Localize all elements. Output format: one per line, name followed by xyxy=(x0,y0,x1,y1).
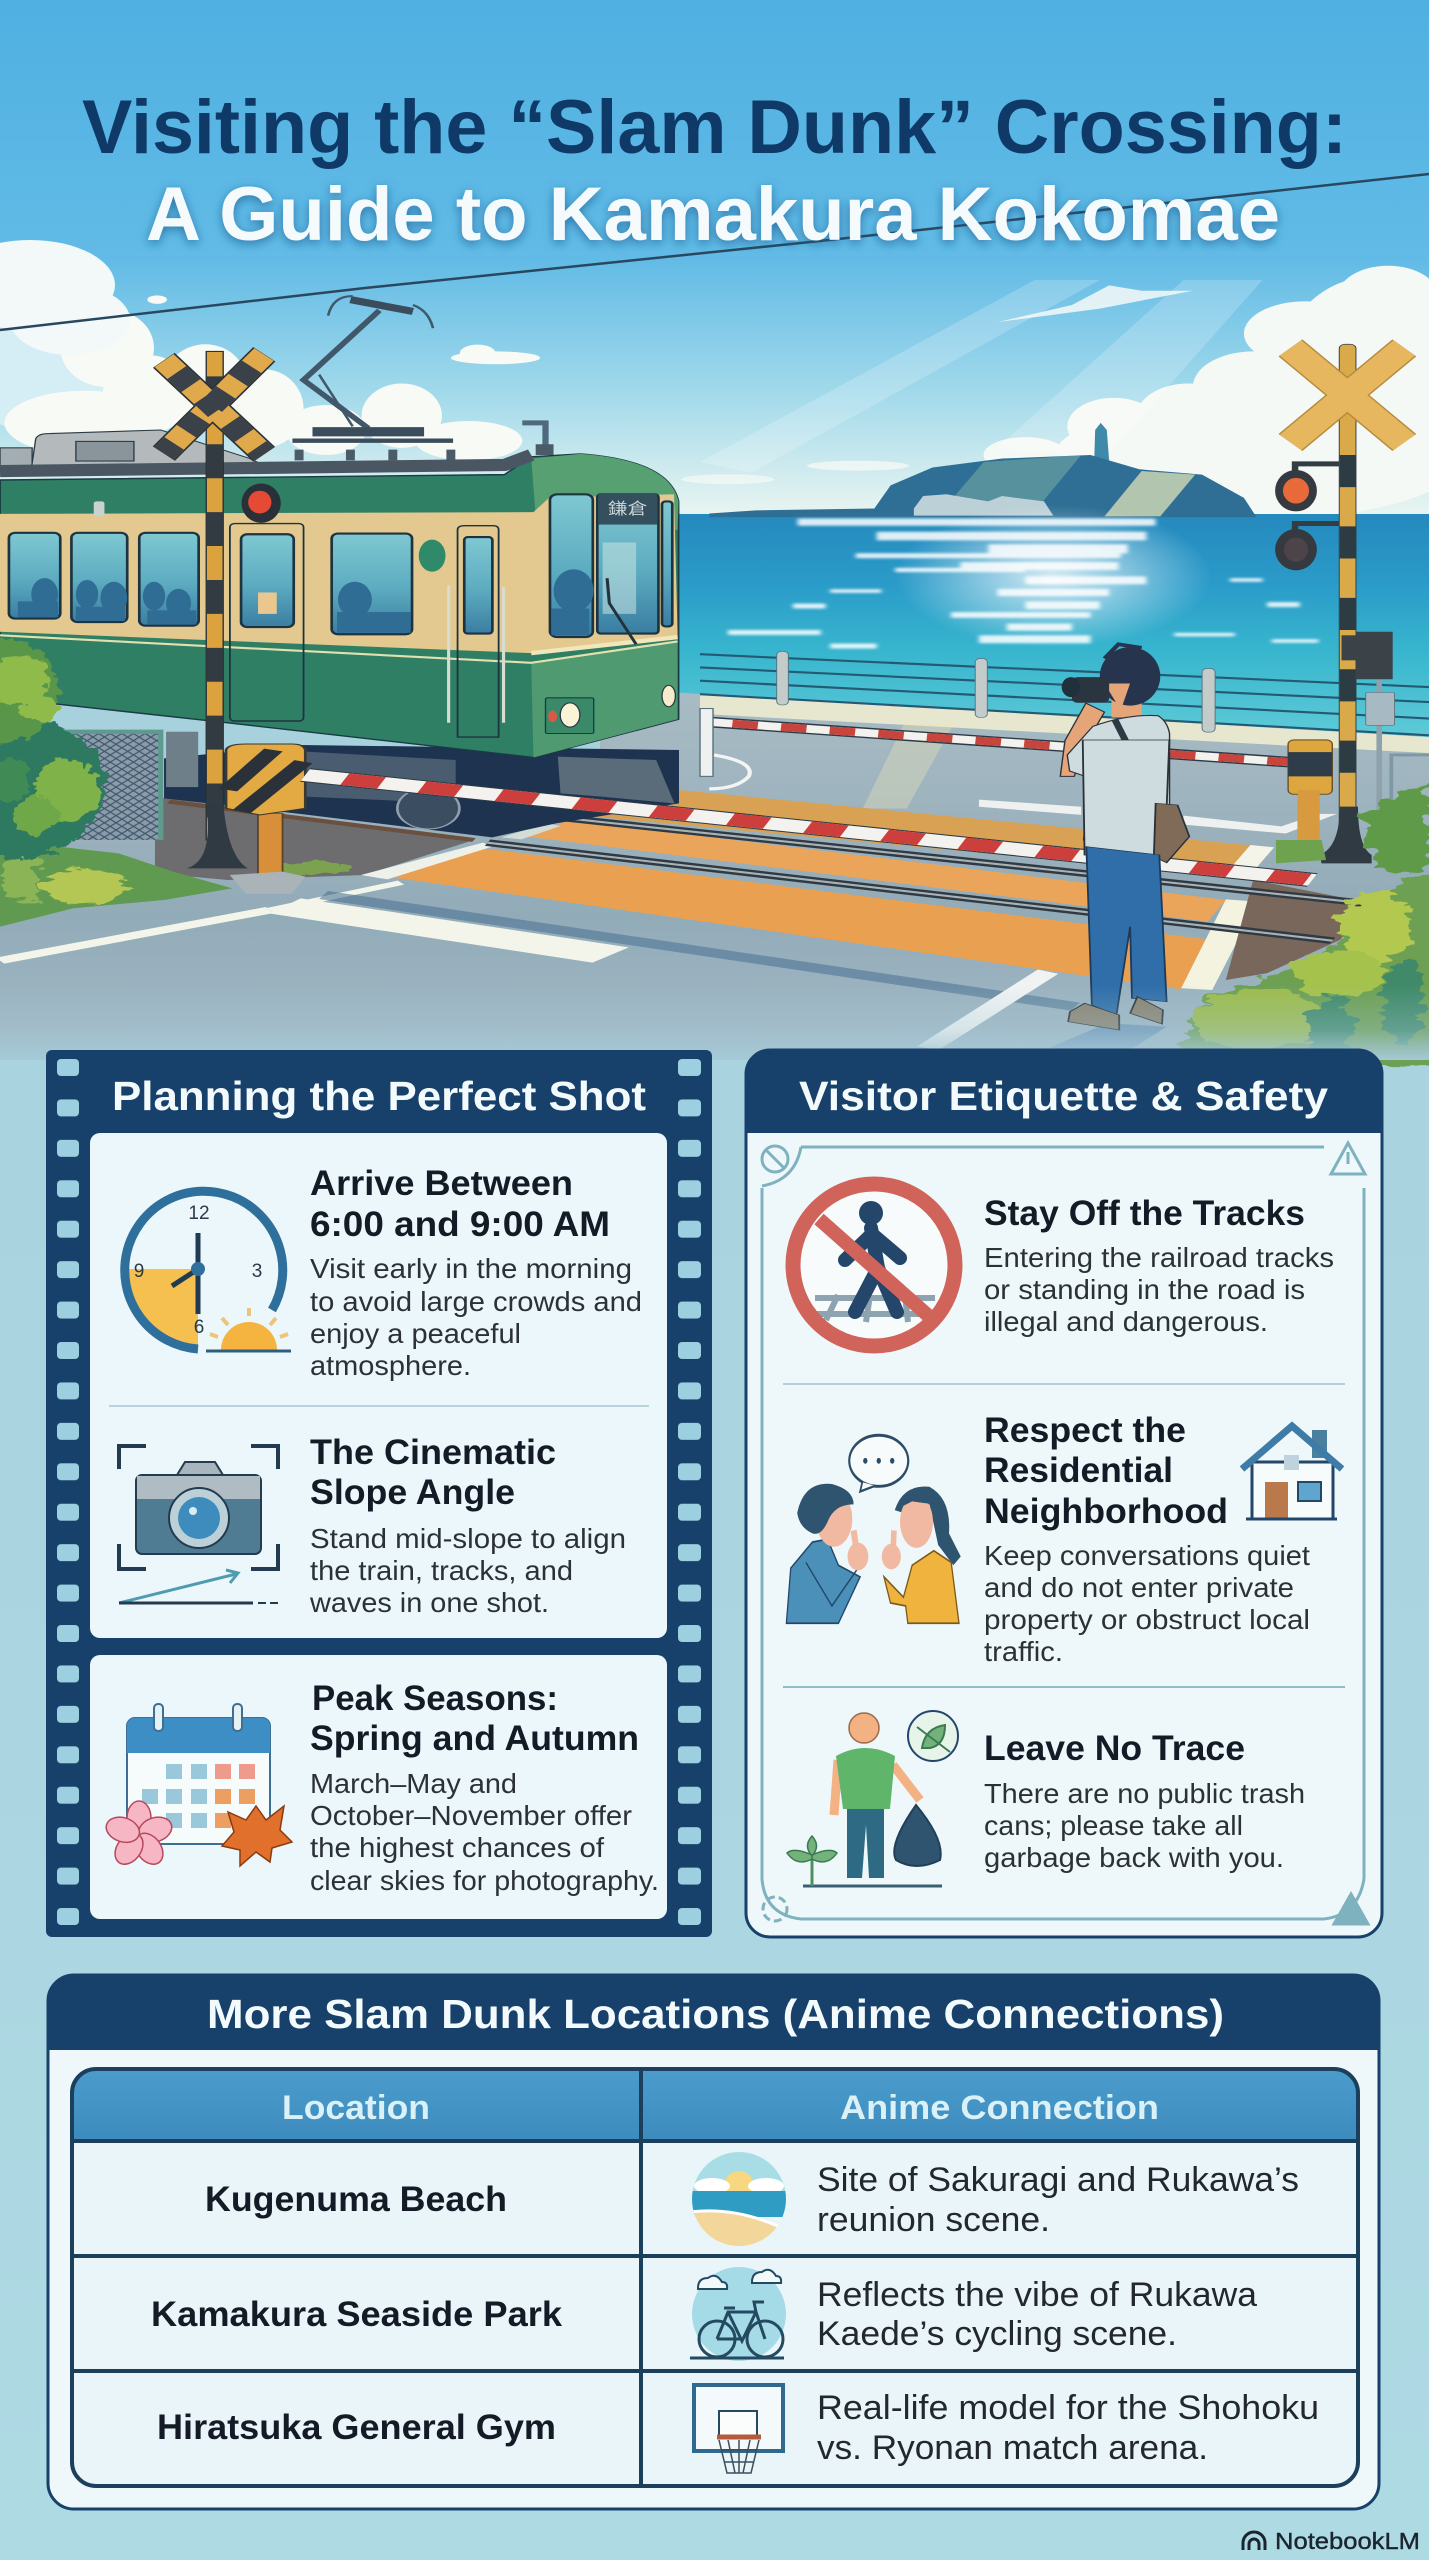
text: stay off the tracks: Entering the railroad tracks xyxy=(984,1242,1334,1273)
text: peak seasons: Peak Seasons: xyxy=(312,1679,558,1718)
icon: clock and sunrise xyxy=(122,1191,291,1351)
text: peak seasons xyxy=(310,1679,659,1896)
text: cinematic slope angle: The Cinematic xyxy=(310,1433,556,1472)
upper body xyxy=(1060,644,1170,840)
sea sparkle xyxy=(728,505,1318,649)
row: hiratsuka general gym xyxy=(157,2385,1319,2473)
icon: bicycle xyxy=(690,2267,786,2361)
icon: quiet conversation xyxy=(786,1435,961,1623)
text: leave no trace: Leave No Trace xyxy=(984,1729,1245,1768)
clouds left xyxy=(0,255,540,460)
text: peak seasons: March–May and xyxy=(310,1768,517,1799)
icon: clock and sunrise: 6 xyxy=(194,1317,204,1338)
text: arrive between: Visit early in the morning xyxy=(310,1253,632,1284)
panel: visitor etiquette and safety xyxy=(746,1050,1382,1937)
text: cinematic slope angle: Stand mid-slope to align xyxy=(310,1523,626,1554)
title xyxy=(82,85,1347,257)
decorative inner frame with corner icons xyxy=(762,1143,1368,1924)
icon: clock and sunrise: 3 xyxy=(252,1261,262,1282)
barrier box, post and front arm xyxy=(187,744,1312,894)
text: peak seasons: October–November offer xyxy=(310,1800,632,1831)
rear barrier arm xyxy=(700,721,1288,762)
row: kamakura seaside park: Reflects the vibe of Rukawa xyxy=(817,2276,1257,2314)
text: leave no trace: cans; please take all xyxy=(984,1810,1243,1841)
text: arrive between: enjoy a peaceful xyxy=(310,1318,521,1349)
left bush xyxy=(0,637,105,859)
text: leave no trace xyxy=(984,1729,1305,1873)
row: kugenuma beach: Kugenuma Beach xyxy=(205,2180,507,2219)
right bush xyxy=(1176,873,1429,1067)
fence top and mesh xyxy=(67,732,161,840)
row: hiratsuka general gym: Hiratsuka General Gym xyxy=(157,2408,556,2447)
seawall, railing and posts xyxy=(700,651,1429,834)
heading: Visitor Etiquette & Safety xyxy=(799,1073,1328,1119)
text: arrive between: Arrive Between xyxy=(310,1164,573,1203)
film sprocket holes xyxy=(57,1059,701,1927)
crossing ground details xyxy=(0,790,1372,1050)
table header row xyxy=(72,2069,1358,2141)
notebooklm credit: NotebookLM xyxy=(1275,2528,1420,2554)
text: respect the residential neighborhood: Residential xyxy=(984,1451,1173,1490)
text: cinematic slope angle xyxy=(309,1433,626,1618)
card: arrive and slope xyxy=(90,1133,667,1638)
text: arrive between xyxy=(310,1164,642,1381)
pantograph xyxy=(292,296,554,455)
sky xyxy=(0,0,1429,530)
title line 2: A Guide to Kamakura Kokomae xyxy=(146,172,1280,257)
row: hiratsuka general gym: vs. Ryonan match arena. xyxy=(817,2429,1208,2467)
text: cinematic slope angle: Slope Angle xyxy=(310,1473,515,1512)
text: cinematic slope angle: waves in one shot. xyxy=(309,1587,549,1618)
train xyxy=(0,296,679,859)
row: kamakura seaside park xyxy=(151,2267,1257,2361)
hero illustration: train at the crossing xyxy=(0,0,1429,1067)
panel: more slam dunk locations xyxy=(48,1975,1379,2509)
photographer xyxy=(1060,644,1189,1030)
train undercarriage xyxy=(164,745,679,837)
text: stay off the tracks: illegal and dangerous. xyxy=(984,1306,1268,1337)
text: leave no trace: There are no public trash xyxy=(984,1778,1305,1809)
text: arrive between: to avoid large crowds and xyxy=(310,1286,642,1317)
text: stay off the tracks xyxy=(984,1194,1334,1337)
icon: clock and sunrise: 12 xyxy=(188,1203,210,1224)
right crossing signal xyxy=(1275,344,1429,840)
doors and details xyxy=(230,524,636,737)
row: kugenuma beach xyxy=(205,2150,1299,2250)
row: kamakura seaside park: Kaede’s cycling scene. xyxy=(817,2315,1177,2353)
icon: beach xyxy=(692,2152,786,2246)
icon: house xyxy=(1242,1426,1342,1519)
lower body xyxy=(1068,740,1189,1030)
location table xyxy=(72,2069,1358,2486)
overhead wire xyxy=(0,174,1429,330)
text: respect the residential neighborhood: property or obstruct local xyxy=(984,1604,1310,1635)
panel: planning the perfect shot xyxy=(46,1050,712,1937)
icon: no walking on tracks xyxy=(789,1180,959,1350)
text: arrive between: atmosphere. xyxy=(310,1350,471,1381)
road surface xyxy=(0,688,1429,1060)
text: stay off the tracks: Stay Off the Tracks xyxy=(984,1194,1305,1233)
heading: Planning the Perfect Shot xyxy=(112,1073,646,1119)
card: seasons xyxy=(90,1655,667,1919)
orange crossing surface xyxy=(361,790,1372,990)
text: leave no trace: garbage back with you. xyxy=(984,1842,1284,1873)
text: respect the residential neighborhood: Keep conversations quiet xyxy=(984,1540,1310,1571)
text: peak seasons: the highest chances of xyxy=(310,1832,604,1863)
icon: basketball hoop xyxy=(694,2385,783,2473)
text: arrive between: 6:00 and 9:00 AM xyxy=(310,1205,610,1244)
icon: notebooklm mark xyxy=(1243,2532,1265,2550)
text: respect the residential neighborhood: Neighborhood xyxy=(984,1492,1228,1531)
text: respect the residential neighborhood: traffic. xyxy=(984,1636,1063,1667)
table header row: Anime Connection xyxy=(840,2089,1159,2127)
text: cinematic slope angle: the train, tracks, and xyxy=(310,1555,573,1586)
hero fade xyxy=(0,985,1429,1060)
icon: person carrying trash bag xyxy=(787,1711,958,1886)
text: peak seasons: Spring and Autumn xyxy=(310,1719,639,1758)
text: respect the residential neighborhood: and do not enter private xyxy=(984,1572,1294,1603)
sea xyxy=(660,514,1429,754)
text: stay off the tracks: or standing in the road is xyxy=(984,1274,1305,1305)
body xyxy=(0,454,679,757)
road markings xyxy=(0,910,270,961)
row: kamakura seaside park: Kamakura Seaside Park xyxy=(151,2295,563,2334)
icon: camera with slope arrow xyxy=(119,1446,278,1603)
gravel and left track xyxy=(155,797,474,880)
row: hiratsuka general gym: Real-life model for the Shohoku xyxy=(817,2389,1319,2427)
red signal xyxy=(242,484,281,523)
left signal pole xyxy=(206,351,223,840)
train: 鎌倉 xyxy=(608,500,648,517)
text: respect the residential neighborhood: Respect the xyxy=(984,1411,1186,1450)
title line 1: Visiting the “Slam Dunk” Crossing: xyxy=(82,85,1347,170)
windows xyxy=(9,494,672,637)
row: kugenuma beach: Site of Sakuragi and Rukawa’s xyxy=(817,2161,1299,2199)
island xyxy=(709,423,1256,517)
text: peak seasons: clear skies for photography. xyxy=(310,1865,659,1896)
heading: More Slam Dunk Locations (Anime Connections) xyxy=(207,1991,1224,2037)
table header row: Location xyxy=(282,2089,430,2127)
crossbuck xyxy=(164,354,264,454)
row: kugenuma beach: reunion scene. xyxy=(817,2201,1050,2239)
clouds upper left xyxy=(0,240,130,355)
clouds right, sun rays and wisp xyxy=(681,266,1429,519)
icon: clock and sunrise: 9 xyxy=(134,1261,144,1282)
icon: calendar with blossom and maple leaf xyxy=(103,1704,292,1870)
grass xyxy=(0,840,232,927)
roof units xyxy=(0,430,268,471)
passengers xyxy=(18,569,594,635)
text: respect the residential neighborhood xyxy=(984,1411,1310,1667)
